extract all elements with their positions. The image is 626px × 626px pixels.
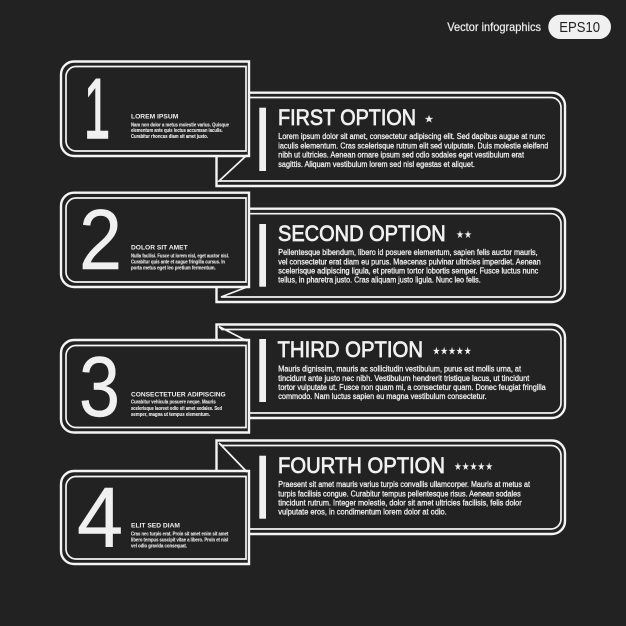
subheading and note 1: Curabitur rhoncus diam sit amet justo. bbox=[131, 134, 209, 140]
subheading and note 3: scelerisque laoreet odio sit amet sodales. Sed bbox=[131, 406, 222, 412]
heading: second option: SECOND OPTION bbox=[278, 221, 446, 246]
number tab frame 3 bbox=[61, 340, 249, 432]
body text 4: tincidunt rutrum. Integer molestie, dolor sit amet ultricies facilisis, felis dolor bbox=[278, 498, 522, 508]
subheading and note 1: Nam non dolor a metus molestie varius. Quisque bbox=[131, 122, 229, 128]
callout frame: fourth option bbox=[216, 440, 565, 534]
subheading and note 1: elementum ante quis lectus accumsan iaculis. bbox=[131, 128, 223, 134]
number 2: 2 bbox=[79, 193, 122, 288]
body text 1: nibh ut ultricies. Aenean ornare ipsum sed odio sodales eget vestibulum erat bbox=[278, 150, 525, 160]
heading: third option: THIRD OPTION bbox=[278, 337, 423, 362]
body text 1 bbox=[278, 131, 548, 169]
body text 2 bbox=[278, 247, 541, 285]
badge: EPS10: EPS10 bbox=[559, 19, 600, 36]
subheading and note 4: Cras nec turpis erat. Proin sit amet enim sit amet bbox=[131, 532, 229, 538]
subheading and note 4: vel odio gravida consequat. bbox=[131, 544, 188, 550]
subheading and note 3: semper, magna ut tempus elementum. bbox=[131, 412, 211, 418]
number 4: 4 bbox=[77, 471, 123, 566]
number 1: 1 bbox=[84, 62, 110, 157]
rating: five stars: ★★★★★ bbox=[454, 461, 493, 473]
body text 4: turpis facilisis congue. Curabitur tempus pellentesque risus. Aenean sodales bbox=[278, 488, 521, 498]
body text 1: sagittis. Aliquam vestibulum lorem sed nisl egestas et aliquet. bbox=[278, 159, 475, 169]
subheading and note 4: ELIT SED DIAM bbox=[131, 523, 180, 530]
body text 2: Pellentesque bibendum, libero id posuere elementum, sapien felis auctor mauris, bbox=[278, 247, 538, 257]
subheading and note 4: libero tempus suscipit vitae a libero. Proin et nisl bbox=[131, 538, 229, 544]
body text 3: Mauris dignissim, mauris ac sollicitudin vestibulum, purus est mollis urna, at bbox=[278, 364, 522, 374]
body text 1: iaculis elementum. Cras scelerisque rutrum elit sed vulputate. Duis molestie eleifend bbox=[278, 140, 548, 150]
subheading and note 2 bbox=[131, 245, 229, 272]
body text 2: vel consectetur erat diam eu purus. Maecenas pulvinar ultricies imperdiet. Aenean bbox=[278, 256, 541, 266]
callout frame: third option bbox=[216, 324, 565, 418]
subheading and note 3: CONSECTETUER ADIPISCING bbox=[131, 391, 226, 398]
body text 4: Praesent sit amet mauris varius turpis convallis ullamcorper. Mauris at metus at bbox=[278, 479, 531, 489]
panel: option 2 bbox=[61, 193, 565, 302]
subheading and note 2: Nulla facilisi. Fusce ut lorem nisl, eget auctor nisl. bbox=[131, 254, 229, 260]
body text 3: tincidunt ante justo nec nibh. Vestibulum hendrerit tristique lacus, ut tincidunt bbox=[278, 373, 530, 383]
divider bar 1 bbox=[259, 108, 266, 171]
body text 3: tortor vulputate ut. Fusce non quam mi, a consectetur quam. Donec feugiat fringilla bbox=[278, 382, 546, 392]
body text 3 bbox=[278, 364, 546, 401]
badge: EPS10 bbox=[548, 15, 611, 39]
panel: option 3 bbox=[61, 324, 565, 435]
number tab frame 4 bbox=[61, 471, 249, 564]
rating: two stars: ★★ bbox=[456, 229, 472, 241]
callout frame: first option bbox=[216, 93, 565, 186]
subheading and note 2: Curabitur quis ante et augue fringilla cursus. In bbox=[131, 260, 225, 266]
subheading and note 3 bbox=[131, 391, 226, 418]
subheading and note 3: Curabitur vehicula posuere neque. Mauris bbox=[131, 400, 216, 406]
rating: one star: ★ bbox=[424, 114, 434, 126]
number tab frame 1 bbox=[61, 62, 249, 156]
callout frame: second option bbox=[216, 209, 565, 302]
body text 1: Lorem ipsum dolor sit amet, consectetur adipiscing elit. Sed dapibus augue at nunc bbox=[278, 131, 546, 141]
panel: option 4 bbox=[61, 440, 565, 566]
subheading and note 2: DOLOR SIT AMET bbox=[131, 245, 189, 252]
subheading and note 1: LOREM IPSUM bbox=[131, 113, 179, 120]
rating: five stars: ★★★★★ bbox=[432, 346, 472, 358]
heading: first option: FIRST OPTION bbox=[278, 105, 416, 130]
divider bar 2 bbox=[259, 224, 266, 287]
body text 4 bbox=[278, 479, 531, 517]
header label: Vector infographics bbox=[447, 20, 541, 34]
divider bar 3 bbox=[259, 339, 266, 402]
body text 2: tellus, in pharetra justo. Cras aliquam justo ligula. Nunc leo felis. bbox=[278, 275, 481, 285]
number 3: 3 bbox=[79, 340, 120, 435]
body text 2: scelerisque adipiscing ligula, et pretium tortor lobortis semper. Fusce luctus nunc bbox=[278, 266, 539, 276]
subheading and note 1 bbox=[131, 113, 229, 140]
subheading and note 2: porta metus eget leo pretium fermentum. bbox=[131, 266, 216, 272]
divider bar 4 bbox=[259, 456, 266, 519]
body text 3: commodo. Nam luctus sapien eu magna vestibulum consectetur. bbox=[278, 391, 487, 401]
subheading and note 4 bbox=[131, 523, 229, 550]
heading: fourth option: FOURTH OPTION bbox=[278, 453, 445, 478]
body text 4: vulputate eros, in condimentum lorem dolor at odio. bbox=[278, 507, 447, 517]
panel: option 1 bbox=[61, 62, 565, 186]
number tab frame 2 bbox=[61, 193, 249, 287]
